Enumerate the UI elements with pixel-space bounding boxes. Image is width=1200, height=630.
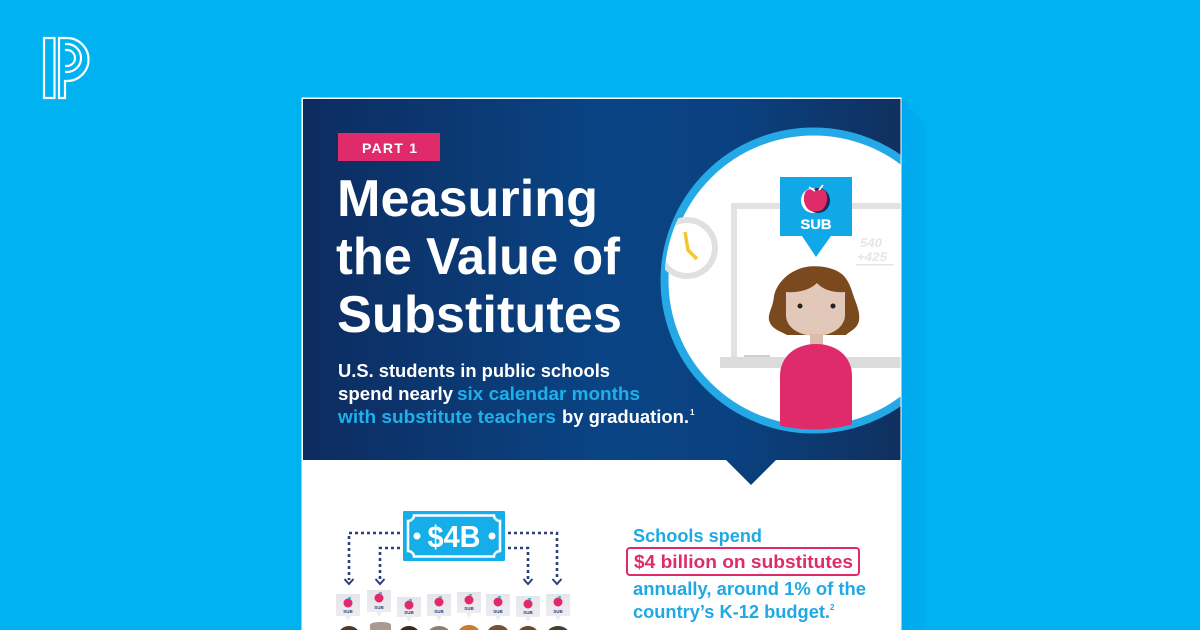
sub 5 <box>457 592 481 630</box>
sub 6: SUB <box>493 609 503 614</box>
subtitle: U.S. students in public schools <box>338 361 610 381</box>
sub speech bubble <box>780 177 852 257</box>
board writing: 540 <box>860 236 882 250</box>
sub 1 <box>336 594 360 630</box>
card shadow <box>901 98 925 630</box>
header pointer <box>726 460 776 485</box>
arrows from money to subs <box>344 533 562 584</box>
sub 5: SUB <box>464 606 474 611</box>
row of substitute teachers <box>336 590 570 630</box>
whiteboard <box>720 206 910 368</box>
card panel <box>302 98 902 630</box>
money icon: $4B: $4B <box>428 519 480 554</box>
sub 8 <box>546 594 570 630</box>
logo <box>44 38 88 98</box>
title: Measuring <box>337 170 598 228</box>
highlighted statistic: $4 billion on substitutes <box>634 552 853 572</box>
subtitle: with substitute teachers <box>337 407 556 427</box>
title: the Value of <box>336 228 621 286</box>
sub 3: SUB <box>404 610 414 615</box>
sub 7 <box>516 596 540 630</box>
sub 8: SUB <box>553 609 563 614</box>
subtitle <box>337 361 695 427</box>
highlighted statistic <box>627 548 859 575</box>
statistic text block <box>627 526 866 622</box>
title <box>336 170 622 344</box>
money icon: $4B <box>403 511 505 561</box>
sub 4 <box>427 594 451 630</box>
header panel <box>303 99 962 630</box>
sub speech bubble: SUB <box>800 217 832 232</box>
part label <box>338 133 440 161</box>
sub 7: SUB <box>523 610 533 615</box>
clock <box>659 220 715 276</box>
sub 3 <box>397 597 421 630</box>
sub 2 <box>367 590 391 630</box>
apple icon <box>801 185 830 213</box>
illustration: substitute teacher in classroom <box>660 128 900 434</box>
subtitle: spend nearly <box>338 384 453 404</box>
board writing <box>856 236 894 266</box>
teacher figure <box>769 266 859 430</box>
title: Substitutes <box>337 286 622 344</box>
sub 6 <box>486 594 510 630</box>
subtitle: six calendar months <box>457 384 640 404</box>
statistic text block: 2 <box>830 603 835 612</box>
board writing: +425 <box>857 250 887 264</box>
statistic text block: Schools spend <box>633 526 762 546</box>
sub 2: SUB <box>374 605 384 610</box>
subtitle: 1 <box>690 408 695 417</box>
sub 4: SUB <box>434 609 444 614</box>
part label: PART 1 <box>362 140 417 156</box>
statistic text block: annually, around 1% of the <box>633 579 866 599</box>
subtitle: by graduation. <box>562 407 689 427</box>
sub 1: SUB <box>343 609 353 614</box>
statistic text block: country’s K-12 budget. <box>633 602 830 622</box>
